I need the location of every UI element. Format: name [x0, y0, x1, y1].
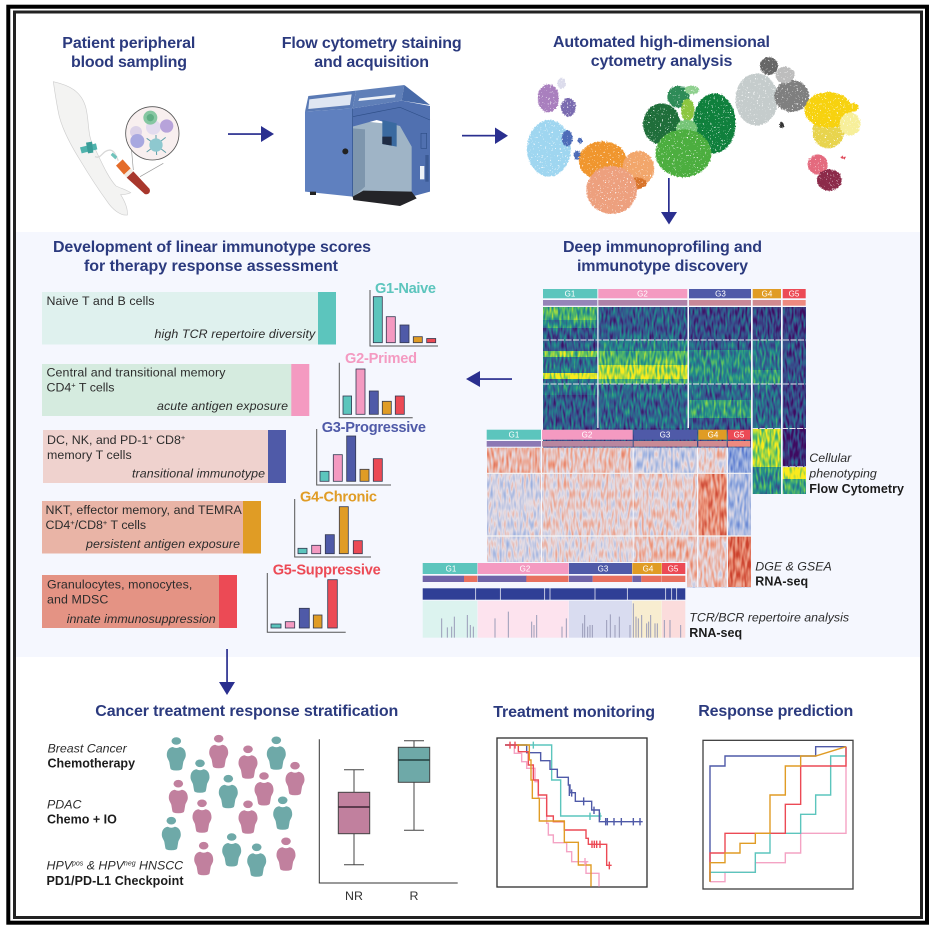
heading: development of linear immunotype scores: Development of linear immunotype scores — [53, 239, 371, 256]
bar chart: G4-Chronic — [295, 490, 377, 557]
panel: G2 primed description: acute antigen exposure — [157, 399, 288, 413]
panel: G1 naive description: high TCR repertoire diversity — [154, 327, 316, 341]
heading: treatment monitoring: Treatment monitoring — [493, 704, 655, 721]
heading: patient peripheral blood sampling — [62, 35, 195, 71]
heading: automated high-dimensional cytometry analysis — [553, 34, 770, 70]
panel: G4 chronic description: + — [70, 518, 75, 527]
heatmap: flow cytometry cellular phenotyping — [543, 289, 806, 494]
panel: G2 primed description: Central and transitional memory — [46, 366, 226, 380]
label: HNSCC checkpoint: pos — [71, 860, 84, 867]
chart: NR vs R box plot — [319, 739, 458, 903]
heatmap: DGE and GSEA RNA-seq — [487, 430, 751, 588]
heading: cancer treatment response stratification: Cancer treatment response stratification — [95, 703, 398, 720]
panel: G4 chronic description: NKT, effector memory, and TEMRA — [46, 503, 243, 517]
panel: G3 progressive description: CD8 — [153, 433, 181, 447]
heading: patient peripheral blood sampling: Patient peripheral — [62, 35, 195, 52]
panel: G3 progressive description: + — [148, 433, 153, 442]
label: PDAC chemo + IO: PDAC — [47, 798, 82, 812]
bar chart: G3-Progressive: G3-Progressive — [322, 420, 426, 436]
middle section background band — [16, 232, 920, 657]
response annotation strip — [423, 576, 685, 582]
bar chart: G4-Chronic: G4-Chronic — [300, 490, 377, 506]
heatmap 2 headers: G3 — [660, 431, 671, 440]
panel: G1 naive description: Naive T and B cells — [46, 294, 154, 308]
panel: G5 suppressive description — [42, 575, 237, 628]
repertoire headers: G4 — [643, 564, 654, 574]
heading: patient peripheral blood sampling: blood sampling — [71, 54, 187, 71]
heatmap 2 headers: G1 — [509, 431, 520, 440]
repertoire group backgrounds — [423, 601, 685, 638]
label: DGE and GSEA RNA-seq: RNA-seq — [755, 574, 808, 588]
heatmap 1 headers: G4 — [762, 290, 773, 298]
clonality bar track — [423, 588, 685, 600]
heading: automated high-dimensional cytometry analysis: cytometry analysis — [591, 53, 732, 70]
panel: G2 primed description: CD4 — [46, 381, 71, 395]
heatmap 1 cells — [543, 307, 806, 494]
bar chart: G1-Naive — [370, 281, 438, 346]
label: breast cancer chemotherapy: Breast Cancer — [48, 742, 128, 756]
repertoire headers: G2 — [520, 564, 531, 574]
heatmap 1 headers: G1 — [565, 290, 576, 298]
heatmap 2 cells — [487, 448, 751, 588]
label: flow cytometry: phenotyping — [808, 467, 877, 481]
chart: NR vs R box plot: NR — [345, 889, 363, 903]
repertoire headers — [423, 563, 685, 574]
label: flow cytometry: Cellular — [809, 451, 852, 465]
arrow: sampling to cytometry — [228, 126, 274, 142]
label: HNSCC checkpoint: & HPV — [83, 858, 126, 872]
panel: G3 progressive description: + — [181, 433, 186, 442]
heading: flow cytometry staining and acquisition: Flow cytometry staining — [282, 35, 462, 52]
label: HNSCC checkpoint: neg — [124, 860, 136, 867]
label: TCR/BCR repertoire RNA-seq: RNA-seq — [689, 626, 742, 640]
chart: TCR/BCR repertoire track — [421, 562, 687, 640]
heatmap 1 headers — [543, 289, 806, 306]
icon: arm with blood draw and cell inset — [53, 82, 179, 215]
heatmap 2 headers: G4 — [708, 431, 719, 440]
heatmap 2 dividers — [487, 448, 751, 587]
chart: Kaplan-Meier survival curves — [497, 738, 647, 887]
heading: deep immunoprofiling and immunotype discovery: Deep immunoprofiling and — [563, 239, 762, 256]
panel: G2 primed description: + — [71, 381, 76, 390]
repertoire headers: G5 — [668, 564, 679, 574]
label: flow cytometry — [808, 451, 904, 496]
icon group: patient cohort — [162, 735, 304, 877]
panel: G4 chronic description: + — [103, 518, 108, 527]
label: HNSCC checkpoint — [46, 858, 184, 888]
arrow: analysis down to immunoprofiling — [661, 178, 677, 224]
panel: G4 chronic description: persistent antigen exposure — [85, 537, 240, 551]
panel: G3 progressive description: DC, NK, and PD-1 — [47, 433, 148, 447]
label: HNSCC checkpoint: HNSCC — [136, 858, 184, 872]
label: HNSCC checkpoint: PD1/PD-L1 Checkpoint — [46, 874, 184, 888]
panel: G4 chronic description: /CD8 — [75, 518, 103, 532]
label: breast cancer chemotherapy — [48, 742, 135, 771]
panel: G3 progressive description — [43, 430, 286, 483]
label: flow cytometry: Flow Cytometry — [809, 482, 904, 496]
heading: flow cytometry staining and acquisition — [282, 35, 462, 71]
panel: G3 progressive description: memory T cells — [47, 448, 132, 462]
heading: development of linear immunotype scores: for therapy response assessment — [84, 258, 339, 275]
heatmap 1 dividers — [543, 307, 806, 494]
chart: ROC response prediction curves — [703, 740, 853, 889]
panel: G4 chronic description: T cells — [107, 518, 146, 532]
heading: response prediction: Response prediction — [698, 703, 853, 720]
arrow: scores down to stratification — [219, 649, 235, 695]
label: DGE and GSEA RNA-seq: DGE & GSEA — [755, 560, 832, 574]
panel: G3 progressive description: transitional immunotype — [132, 467, 265, 481]
icon: flow cytometer instrument — [305, 85, 430, 206]
heading: flow cytometry staining and acquisition: and acquisition — [314, 54, 429, 71]
heading: deep immunoprofiling and immunotype discovery — [563, 239, 762, 275]
arrow: heatmaps to immunotype scores — [466, 371, 512, 387]
bar chart: G2-Primed: G2-Primed — [345, 351, 417, 367]
chart: tSNE cluster map — [527, 57, 860, 214]
panel: G2 primed description — [42, 364, 309, 416]
heatmap 1 headers: G2 — [637, 290, 648, 298]
repertoire headers: G1 — [446, 564, 457, 574]
heatmap 2 headers — [487, 430, 750, 447]
panel: G4 chronic description: CD4 — [46, 518, 70, 532]
label: PDAC chemo + IO: Chemo + IO — [47, 813, 117, 827]
bar chart: G2-Primed — [339, 351, 417, 418]
heatmap 2 headers: G5 — [734, 431, 745, 440]
label: TCR/BCR repertoire RNA-seq — [689, 611, 849, 640]
heading: automated high-dimensional cytometry analysis: Automated high-dimensional — [553, 34, 770, 51]
heatmap 1 headers: G3 — [715, 290, 726, 298]
panel: G5 suppressive description: Granulocytes, monocytes, — [47, 578, 192, 592]
label: HNSCC checkpoint: HPV — [46, 858, 72, 872]
heading: development of linear immunotype scores — [53, 239, 371, 275]
label: breast cancer chemotherapy: Chemotherapy — [48, 757, 135, 771]
label: DGE and GSEA RNA-seq — [755, 560, 832, 588]
label: PDAC chemo + IO — [47, 798, 117, 827]
panel: G4 chronic description — [42, 501, 261, 554]
panel: G1 naive description — [42, 292, 336, 344]
bar chart: G5-Suppressive: G5-Suppressive — [273, 563, 381, 579]
heatmap 2 headers: G2 — [582, 431, 593, 440]
panel: G5 suppressive description: innate immunosuppression — [67, 612, 216, 626]
bar chart: G5-Suppressive — [267, 563, 381, 632]
label: TCR/BCR repertoire RNA-seq: TCR/BCR repertoire analysis — [689, 611, 849, 625]
chart: NR vs R box plot: R — [410, 889, 419, 903]
arrow: cytometry to analysis — [462, 128, 508, 144]
bar chart: G1-Naive: G1-Naive — [375, 281, 436, 297]
repertoire spikes — [442, 603, 681, 638]
panel: G2 primed description: T cells — [76, 381, 114, 395]
heading: deep immunoprofiling and immunotype discovery: immunotype discovery — [577, 258, 748, 275]
heatmap 1 headers: G5 — [789, 290, 800, 298]
repertoire headers: G3 — [598, 564, 609, 574]
panel: G5 suppressive description: and MDSC — [47, 593, 108, 607]
bar chart: G3-Progressive — [317, 420, 426, 485]
